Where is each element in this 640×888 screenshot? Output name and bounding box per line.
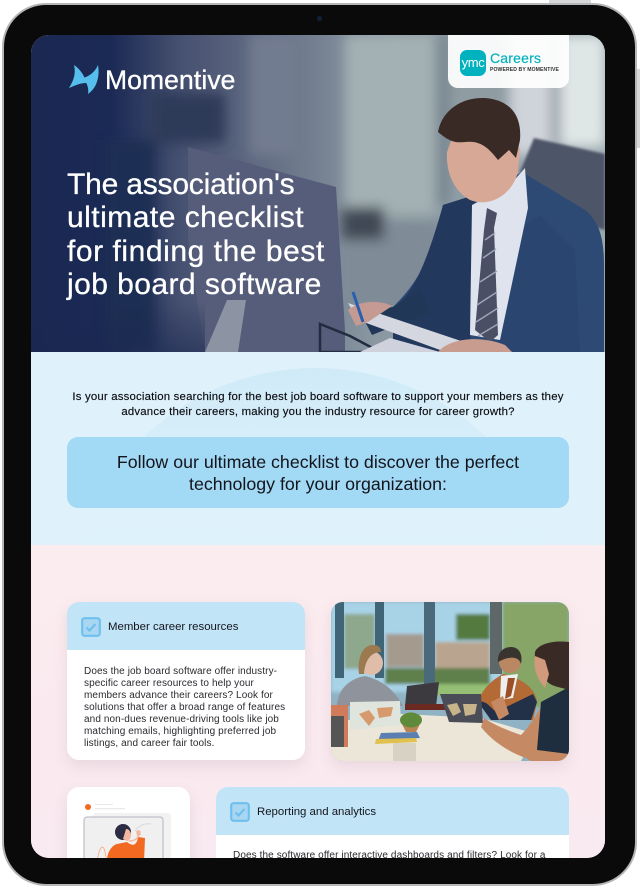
card body: solutions that offer a broad range of features	[84, 702, 285, 713]
cup	[393, 743, 416, 761]
illustration header	[85, 804, 91, 810]
dark chair	[405, 682, 439, 706]
panel: checklist	[31, 545, 605, 858]
callout: Follow our ultimate checklist to discover the perfect	[117, 452, 519, 472]
camera	[317, 16, 322, 21]
card body: Does the job board software offer industry-	[84, 666, 277, 677]
tie	[475, 208, 498, 342]
icon: checkbox	[81, 617, 101, 637]
side buttons	[637, 69, 640, 148]
panel: intro	[31, 352, 605, 545]
card body: matching emails, highlighting preferred job	[84, 726, 276, 737]
intro text	[72, 391, 564, 418]
man	[478, 674, 537, 720]
notebook stack	[331, 705, 348, 747]
card: Member career resources	[67, 602, 305, 760]
card header	[67, 602, 305, 650]
monitor	[188, 147, 345, 352]
tagline: POWERED BY MOMENTIVE	[490, 67, 559, 73]
woman right	[481, 687, 569, 761]
decorative circle	[68, 368, 562, 862]
photo: team meeting	[331, 602, 569, 761]
desk items	[320, 324, 380, 352]
wordmark: Momentive	[105, 65, 236, 95]
icon: checkbox	[230, 802, 250, 822]
man: suit	[393, 172, 604, 352]
person	[107, 837, 145, 862]
card body: listings, and career fair tools.	[84, 738, 214, 749]
card body	[84, 666, 285, 749]
title: job board software	[67, 268, 322, 301]
laptops	[350, 701, 401, 730]
card header	[216, 787, 569, 835]
top button	[549, 0, 591, 3]
title: The association's	[67, 168, 294, 201]
title: ultimate checklist	[67, 201, 304, 234]
Careers wordmark: Careers	[490, 50, 541, 66]
plant	[402, 724, 420, 732]
card body: members advance their careers? Look for	[84, 690, 273, 701]
card: illustration	[67, 787, 190, 877]
logo: Momentive	[69, 65, 236, 95]
card: Reporting and analytics	[216, 787, 569, 877]
woman	[337, 676, 403, 706]
intro text: Is your association searching for the best job board software to support your members as they	[72, 391, 564, 403]
table	[331, 714, 536, 761]
hero photo	[31, 35, 605, 352]
title	[66, 168, 325, 301]
callout: technology for your organization:	[189, 474, 447, 494]
sofa	[520, 138, 605, 230]
icon: ymc: ymc	[462, 55, 484, 70]
card body: and non-dues revenue-driving tools like job	[84, 714, 279, 725]
icon: Momentive mark	[69, 65, 99, 94]
logo: YMC Careers	[448, 35, 569, 88]
card heading: Member career resources	[108, 621, 238, 633]
card body: specific career resources to help your	[84, 678, 254, 689]
icon: ymc	[460, 50, 486, 76]
head	[447, 130, 520, 202]
intro text: advance their careers, making you the industry resource for career growth?	[121, 406, 515, 418]
arm and paper	[360, 290, 430, 335]
callout	[67, 437, 569, 508]
books	[378, 732, 420, 741]
title: for finding the best	[67, 235, 325, 268]
card heading: Reporting and analytics	[257, 806, 376, 818]
